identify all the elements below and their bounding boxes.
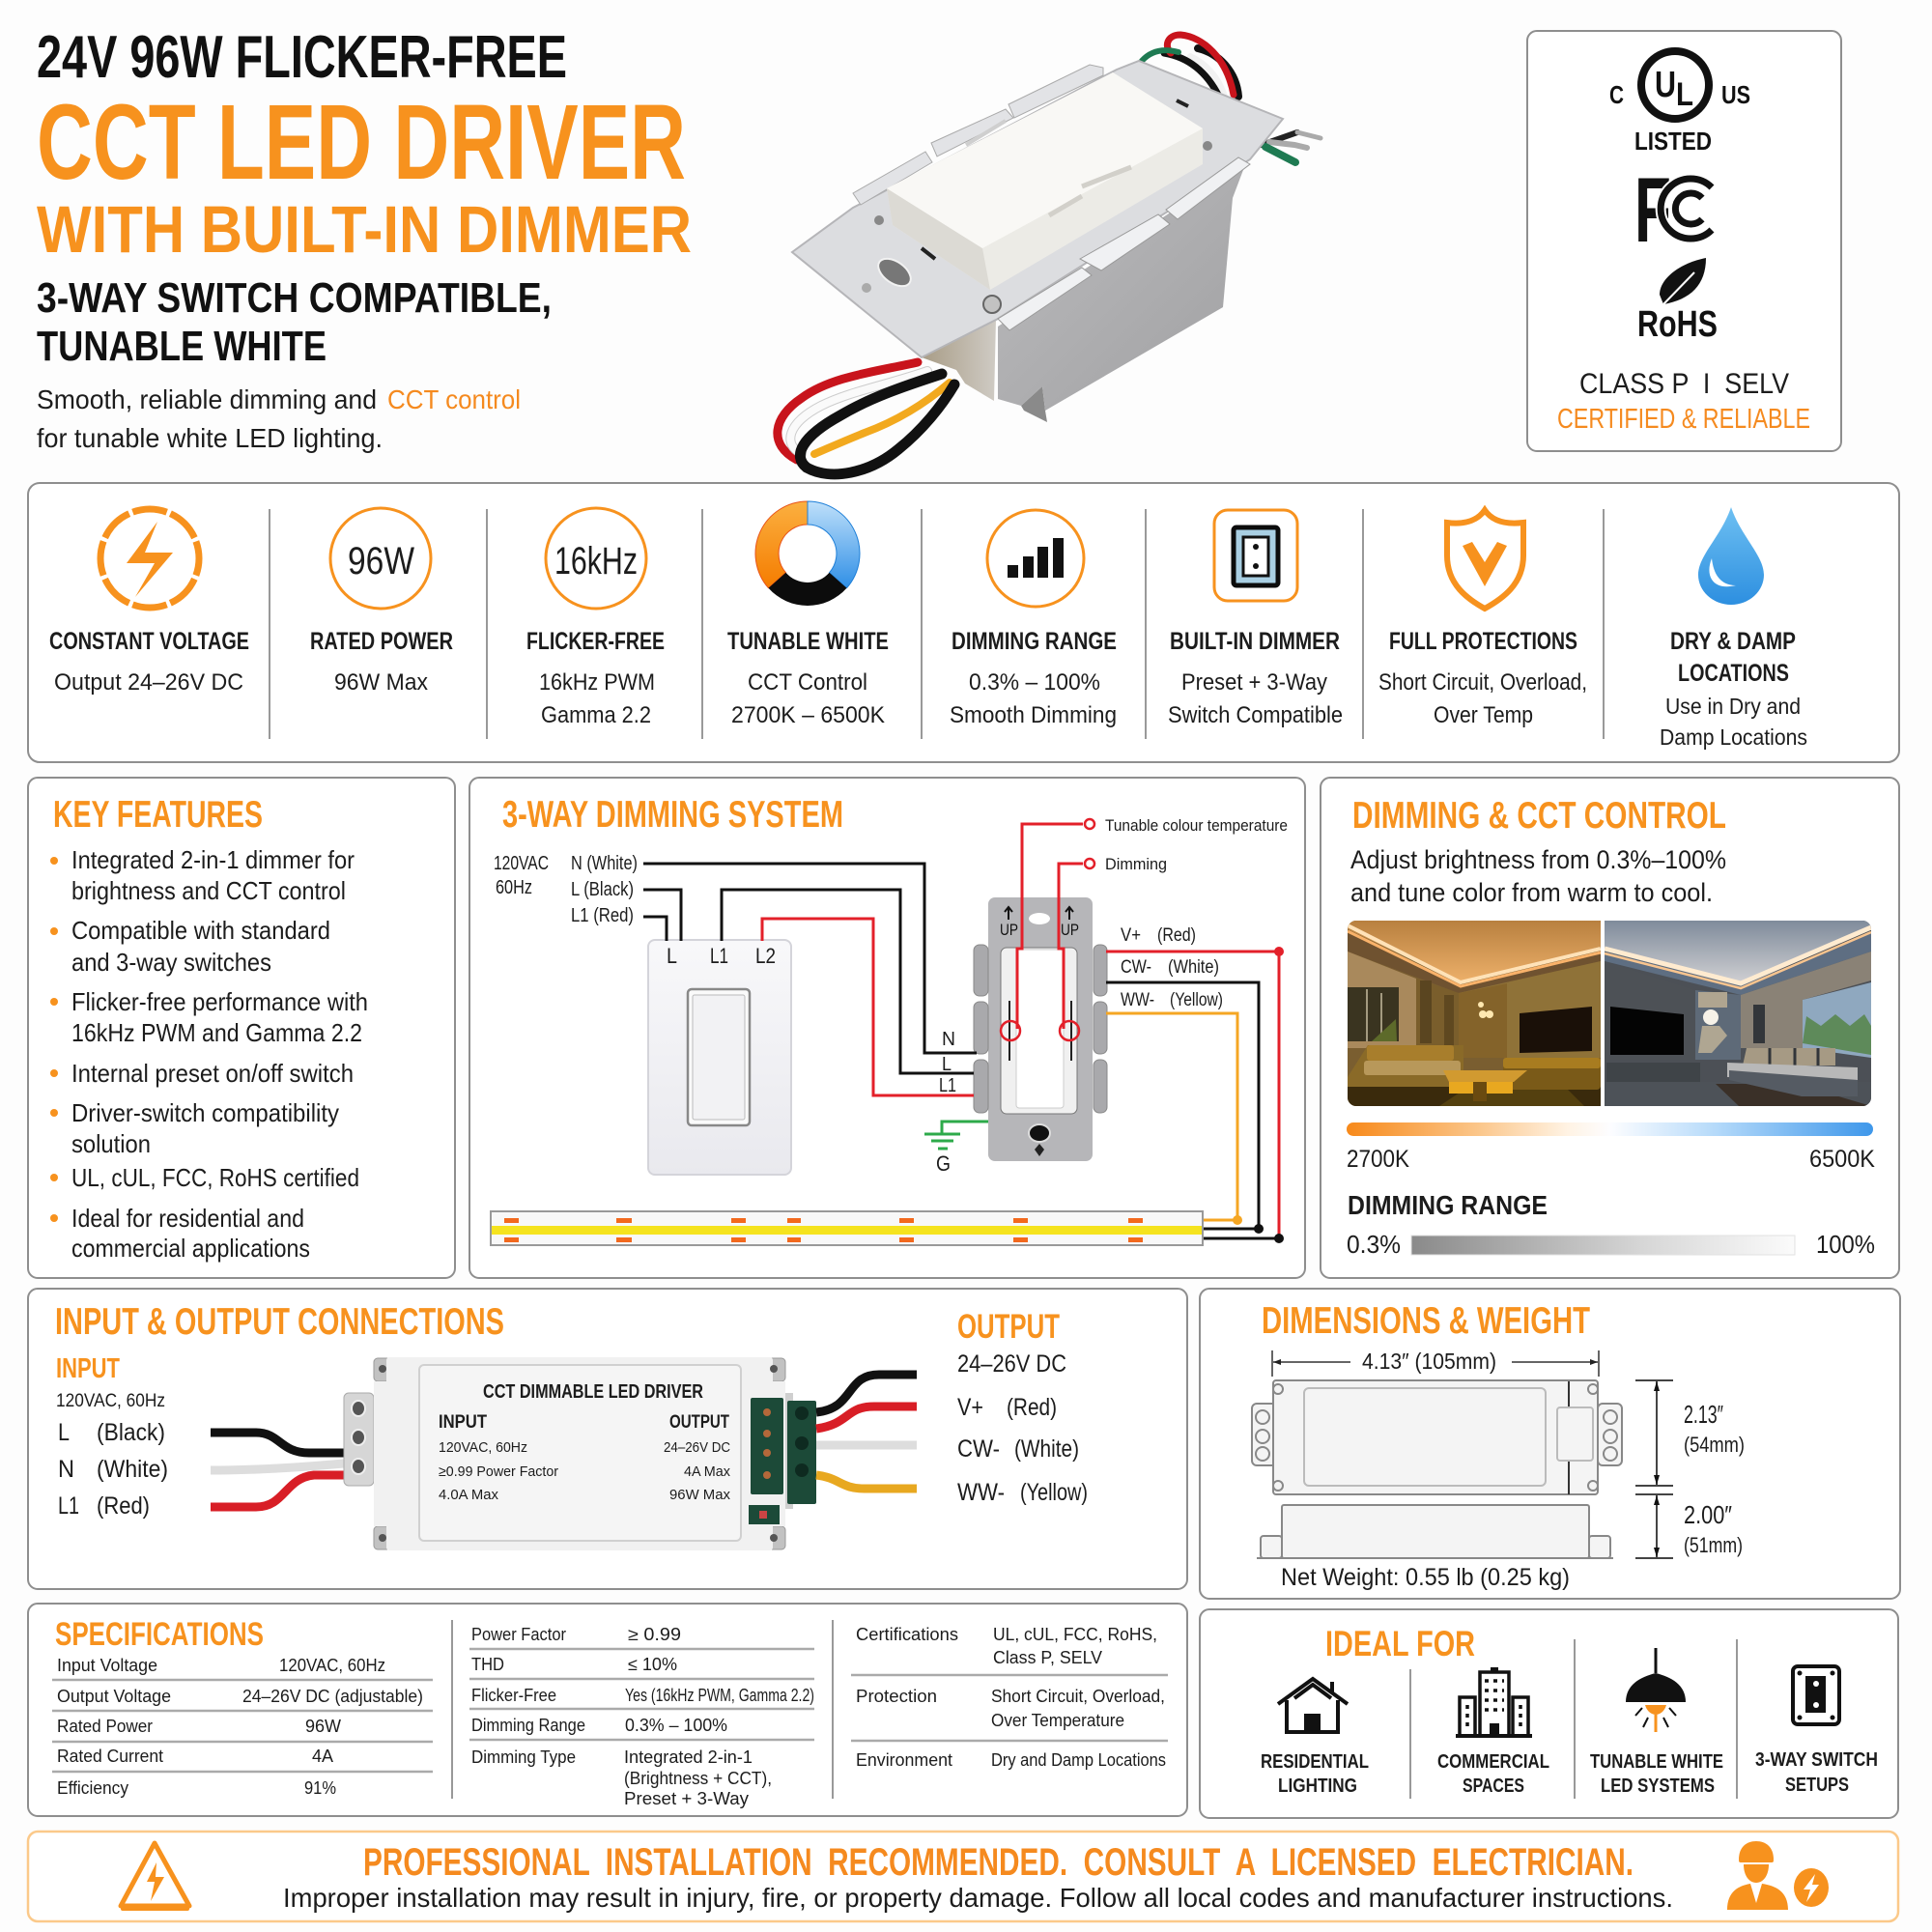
dimming range bar: 100% xyxy=(1816,1230,1875,1259)
intro text: CCT control xyxy=(387,384,521,414)
feature list: and 3-way switches xyxy=(71,948,271,977)
width dimension xyxy=(1272,1349,1599,1377)
spec column 1: Rated Power xyxy=(57,1717,153,1736)
description xyxy=(1350,845,1726,907)
height dimensions: (54mm) xyxy=(1684,1433,1745,1457)
input labels xyxy=(494,853,638,926)
height dimensions: 2.13″ xyxy=(1684,1400,1723,1429)
input labels: L1 (Red) xyxy=(571,905,634,926)
feature: built-in dimmer: Preset + 3-Way xyxy=(1181,669,1327,696)
spec column 3: Environment xyxy=(856,1750,952,1770)
spec column 1: 96W xyxy=(305,1717,341,1736)
description: Adjust brightness from 0.3%–100% xyxy=(1350,845,1726,874)
wiring connection markers xyxy=(1001,819,1284,1243)
input labels: 120VAC, 60Hz xyxy=(56,1391,165,1411)
spec column 2: Power Factor xyxy=(471,1625,566,1644)
UL listed logo xyxy=(1609,51,1750,156)
spec column 1: 4A xyxy=(312,1747,333,1766)
wiring labels: Dimming xyxy=(1105,855,1167,873)
UL listed logo: LISTED xyxy=(1634,127,1712,156)
title line 1: 24V 96W FLICKER-FREE xyxy=(37,24,567,91)
LED driver unit: 120VAC, 60Hz xyxy=(439,1439,527,1456)
input labels: 120VAC xyxy=(494,853,549,874)
input labels: N (White) xyxy=(571,853,638,874)
input labels: (Black) xyxy=(97,1419,165,1446)
feature: dry and damp: LOCATIONS xyxy=(1678,660,1789,687)
use: 3-way switch: SETUPS xyxy=(1785,1775,1849,1796)
spec column 2: 0.3% – 100% xyxy=(625,1716,727,1735)
feature list: Ideal for residential and xyxy=(71,1204,304,1233)
wiring labels: (Red) xyxy=(1157,925,1196,946)
panel: specifications xyxy=(28,1604,1187,1816)
feature: full protections xyxy=(1378,510,1587,728)
use: residential: LIGHTING xyxy=(1278,1776,1357,1797)
feature: dry and damp: DRY & DAMP xyxy=(1670,628,1796,655)
spec column 2: Preset + 3-Way xyxy=(624,1789,749,1808)
heading: 3-way dimming: 3-WAY DIMMING SYSTEM xyxy=(502,794,843,836)
feature: rated power: RATED POWER xyxy=(310,628,453,655)
panel: feature icon strip xyxy=(28,483,1899,762)
feature: dimming range: Smooth Dimming xyxy=(950,702,1117,728)
title line 2: CCT LED DRIVER xyxy=(37,83,686,202)
subtitle: 3-WAY SWITCH COMPATIBLE, xyxy=(37,274,552,322)
input labels: (White) xyxy=(97,1456,168,1483)
use: residential: RESIDENTIAL xyxy=(1261,1751,1369,1773)
spec column 3: Protection xyxy=(856,1687,937,1706)
panel: dimensions and weight xyxy=(1200,1289,1900,1599)
title line 3: WITH BUILT-IN DIMMER xyxy=(37,192,692,267)
feature: tunable white: 2700K – 6500K xyxy=(731,702,885,728)
feature: built-in dimmer: BUILT-IN DIMMER xyxy=(1170,628,1340,655)
feature: flicker-free: 16kHz xyxy=(554,540,638,582)
wiring labels xyxy=(936,816,1288,1176)
spec column 2: THD xyxy=(471,1655,504,1674)
feature list: Driver-switch compatibility xyxy=(71,1098,339,1127)
feature list: Internal preset on/off switch xyxy=(71,1059,354,1088)
CCT gradient bar xyxy=(1347,1122,1873,1136)
subtitle: TUNABLE WHITE xyxy=(37,323,327,370)
feature: dry and damp xyxy=(1660,507,1807,750)
feature list: commercial applications xyxy=(71,1234,310,1263)
use: commercial: SPACES xyxy=(1463,1776,1524,1797)
spec column 3: Short Circuit, Overload, xyxy=(991,1687,1165,1706)
spec column 3: Over Temperature xyxy=(991,1711,1124,1730)
input wires xyxy=(211,1433,344,1507)
feature list: 16kHz PWM and Gamma 2.2 xyxy=(71,1018,362,1047)
feature: tunable white xyxy=(727,501,889,728)
wiring labels: N xyxy=(942,1029,955,1050)
intro text: for tunable white LED lighting. xyxy=(37,423,383,453)
input labels xyxy=(56,1353,168,1520)
LED driver unit: OUTPUT xyxy=(669,1412,729,1433)
feature: full protections: Over Temp xyxy=(1434,702,1533,728)
spec column 3 xyxy=(851,1625,1168,1770)
dimming range bar xyxy=(1347,1230,1875,1259)
panel: dimming and CCT control xyxy=(1321,778,1899,1278)
wiring labels: WW- xyxy=(1121,990,1154,1010)
top view drawing xyxy=(1252,1380,1622,1494)
use: tunable white: TUNABLE WHITE xyxy=(1590,1751,1723,1773)
LED driver unit: ≥0.99 Power Factor xyxy=(439,1463,558,1480)
spec column 2: ≤ 10% xyxy=(628,1655,677,1674)
feature list: brightness and CCT control xyxy=(71,876,346,905)
heading: ideal for: IDEAL FOR xyxy=(1325,1624,1475,1663)
output labels: OUTPUT xyxy=(957,1308,1060,1346)
input labels: INPUT xyxy=(56,1353,120,1384)
use: 3-way switch: 3-WAY SWITCH xyxy=(1755,1749,1878,1771)
RoHS logo: RoHS xyxy=(1637,304,1718,345)
input labels: 60Hz xyxy=(496,877,532,898)
heading: key features: KEY FEATURES xyxy=(53,794,263,836)
intro text xyxy=(37,384,521,453)
feature: flicker-free: 16kHz PWM xyxy=(539,669,655,696)
feature list: solution xyxy=(71,1129,151,1158)
dimming range bar: 0.3% xyxy=(1347,1230,1401,1259)
dimmer unit: UP xyxy=(1061,921,1079,939)
feature list: Flicker-free performance with xyxy=(71,987,368,1016)
feature: tunable white: CCT Control xyxy=(748,669,867,696)
use: tunable white xyxy=(1590,1648,1723,1797)
LED driver unit: 4A Max xyxy=(684,1463,730,1480)
spec column 3: Certifications xyxy=(856,1625,958,1644)
wall switch xyxy=(648,940,791,1175)
feature: rated power: 96W xyxy=(348,540,414,582)
panel: safety warning banner xyxy=(28,1832,1898,1921)
output labels: V+ xyxy=(957,1394,983,1421)
feature: dimming range: DIMMING RANGE xyxy=(952,628,1117,655)
feature: built-in dimmer: Switch Compatible xyxy=(1168,702,1343,728)
CCT labels xyxy=(1347,1146,1875,1173)
use: residential xyxy=(1261,1679,1369,1797)
output labels: 24–26V DC xyxy=(957,1350,1066,1378)
spec column 2 xyxy=(469,1625,814,1808)
spec column 2: (Brightness + CCT), xyxy=(624,1769,772,1788)
feature: tunable white: TUNABLE WHITE xyxy=(727,628,889,655)
spec column 3: UL, cUL, FCC, RoHS, xyxy=(993,1625,1157,1644)
wall switch: L xyxy=(667,944,677,968)
feature: rated power xyxy=(310,508,453,696)
feature: constant voltage: CONSTANT VOLTAGE xyxy=(49,628,249,655)
LED driver unit: 96W Max xyxy=(669,1487,730,1503)
wiring labels: L1 xyxy=(939,1075,956,1096)
wall switch: L2 xyxy=(755,944,776,968)
feature: rated power: 96W Max xyxy=(334,669,428,696)
dimming range heading: DIMMING RANGE xyxy=(1348,1190,1548,1220)
LED driver unit: INPUT xyxy=(439,1412,487,1433)
input labels: L1 xyxy=(58,1492,79,1520)
feature list xyxy=(50,845,368,1263)
spec column 1: 120VAC, 60Hz xyxy=(279,1656,385,1675)
spec column 2: ≥ 0.99 xyxy=(628,1625,681,1644)
output labels: (White) xyxy=(1014,1435,1079,1463)
wiring labels: G xyxy=(936,1151,951,1176)
panel: ideal for xyxy=(1200,1609,1898,1818)
use: commercial xyxy=(1437,1667,1549,1797)
height dimensions xyxy=(1635,1380,1745,1558)
wiring labels: CW- xyxy=(1121,957,1151,978)
spec column 1 xyxy=(52,1656,433,1798)
input labels: L (Black) xyxy=(571,879,634,900)
spec column 2: Yes (16kHz PWM, Gamma 2.2) xyxy=(625,1686,814,1705)
wiring labels: (White) xyxy=(1168,957,1219,978)
photo: warm and cool room comparison xyxy=(1348,921,1871,1106)
feature: dry and damp: Damp Locations xyxy=(1660,724,1807,750)
wiring labels: V+ xyxy=(1121,925,1141,946)
feature: built-in dimmer xyxy=(1168,510,1343,728)
heading: specifications: SPECIFICATIONS xyxy=(55,1616,264,1653)
feature: constant voltage: Output 24–26V DC xyxy=(54,669,243,696)
FCC logo: F xyxy=(1634,159,1671,262)
input labels: (Red) xyxy=(97,1492,150,1520)
heading: input output: INPUT & OUTPUT CONNECTIONS xyxy=(55,1301,504,1343)
LED driver unit xyxy=(344,1357,816,1550)
class text: CLASS P I SELV xyxy=(1579,368,1789,400)
spec column 1: Rated Current xyxy=(57,1747,163,1766)
output labels xyxy=(957,1308,1088,1506)
UL listed logo: U xyxy=(1655,65,1676,105)
spec column 3: Class P, SELV xyxy=(993,1648,1102,1667)
net weight: Net Weight: 0.55 lb (0.25 kg) xyxy=(1281,1564,1570,1591)
width dimension: 4.13″ (105mm) xyxy=(1362,1349,1496,1374)
feature list: Integrated 2-in-1 dimmer for xyxy=(71,845,355,874)
side view drawing xyxy=(1257,1505,1613,1558)
output labels: (Red) xyxy=(1007,1394,1057,1421)
panel: key features xyxy=(28,778,455,1278)
dimmer unit: UP xyxy=(1000,921,1018,939)
UL listed logo: L xyxy=(1676,76,1693,113)
output labels: CW- xyxy=(957,1435,1000,1463)
spec column 2: Flicker-Free xyxy=(471,1686,556,1705)
feature: flicker-free: Gamma 2.2 xyxy=(541,702,651,728)
spec column 1: 24–26V DC (adjustable) xyxy=(242,1687,423,1706)
feature: constant voltage xyxy=(49,509,249,696)
feature list: Compatible with standard xyxy=(71,916,330,945)
LED strip xyxy=(491,1211,1203,1245)
heading: dimensions: DIMENSIONS & WEIGHT xyxy=(1262,1300,1590,1342)
UL listed logo: US xyxy=(1721,80,1750,109)
description: and tune color from warm to cool. xyxy=(1350,878,1713,907)
feature: dry and damp: Use in Dry and xyxy=(1665,694,1801,719)
wall switch: L1 xyxy=(710,944,728,968)
wiring labels: (Yellow) xyxy=(1170,990,1223,1010)
output wires xyxy=(816,1375,917,1489)
intro text: Smooth, reliable dimming and xyxy=(37,384,377,414)
feature list: UL, cUL, FCC, RoHS certified xyxy=(71,1163,359,1192)
LED driver unit: CCT DIMMABLE LED DRIVER xyxy=(483,1381,703,1403)
LED driver unit: 4.0A Max xyxy=(439,1487,498,1503)
use: tunable white: LED SYSTEMS xyxy=(1601,1776,1715,1797)
spec column 2: Integrated 2-in-1 xyxy=(624,1747,753,1767)
feature: flicker-free xyxy=(526,508,665,728)
dimmer unit xyxy=(974,897,1107,1161)
certified text: CERTIFIED & RELIABLE xyxy=(1557,404,1810,435)
subtitle xyxy=(37,274,552,370)
icon: warning triangle xyxy=(121,1843,189,1911)
output labels: (Yellow) xyxy=(1020,1479,1088,1506)
feature: flicker-free: FLICKER-FREE xyxy=(526,628,665,655)
input labels: N xyxy=(58,1456,74,1483)
feature: dimming range: 0.3% – 100% xyxy=(969,669,1100,696)
wiring labels: L xyxy=(942,1054,952,1075)
RoHS logo xyxy=(1637,258,1718,345)
panel: 3-way dimming system xyxy=(469,778,1305,1278)
wiring labels: Tunable colour temperature xyxy=(1105,816,1288,835)
heading: dimming and cct: DIMMING & CCT CONTROL xyxy=(1352,795,1726,837)
height dimensions: 2.00″ xyxy=(1684,1500,1732,1529)
CCT labels: 6500K xyxy=(1809,1146,1875,1173)
use: commercial: COMMERCIAL xyxy=(1437,1751,1549,1773)
feature: full protections: FULL PROTECTIONS xyxy=(1389,628,1577,655)
spec column 2: Dimming Type xyxy=(471,1747,576,1767)
product photo: dimmer switch with wires xyxy=(778,35,1321,474)
spec column 2: Dimming Range xyxy=(471,1716,585,1735)
input labels: L xyxy=(58,1419,70,1446)
warning text: Improper installation may result in injury, fire, or property damage. Follow all local codes and manufacturer instructions. xyxy=(283,1883,1673,1913)
panel: input and output connections xyxy=(28,1289,1187,1589)
height dimensions: (51mm) xyxy=(1684,1533,1743,1557)
output labels: WW- xyxy=(957,1479,1005,1506)
wiring xyxy=(643,824,1279,1238)
spec column 1: 91% xyxy=(304,1778,336,1798)
spec column 3: Dry and Damp Locations xyxy=(991,1750,1166,1770)
spec column 1: Output Voltage xyxy=(57,1687,171,1706)
UL listed logo: C xyxy=(1609,80,1624,109)
spec column 1: Efficiency xyxy=(57,1778,128,1798)
spec column 1: Input Voltage xyxy=(57,1656,157,1675)
feature: dimming range xyxy=(950,510,1117,728)
CCT labels: 2700K xyxy=(1347,1146,1409,1173)
LED driver unit: 24–26V DC xyxy=(664,1439,730,1456)
use: 3-way switch xyxy=(1755,1666,1878,1796)
feature: full protections: Short Circuit, Overload, xyxy=(1378,669,1587,696)
header title block xyxy=(37,24,692,453)
icon: electrician xyxy=(1727,1841,1829,1910)
certifications panel xyxy=(1527,31,1841,451)
